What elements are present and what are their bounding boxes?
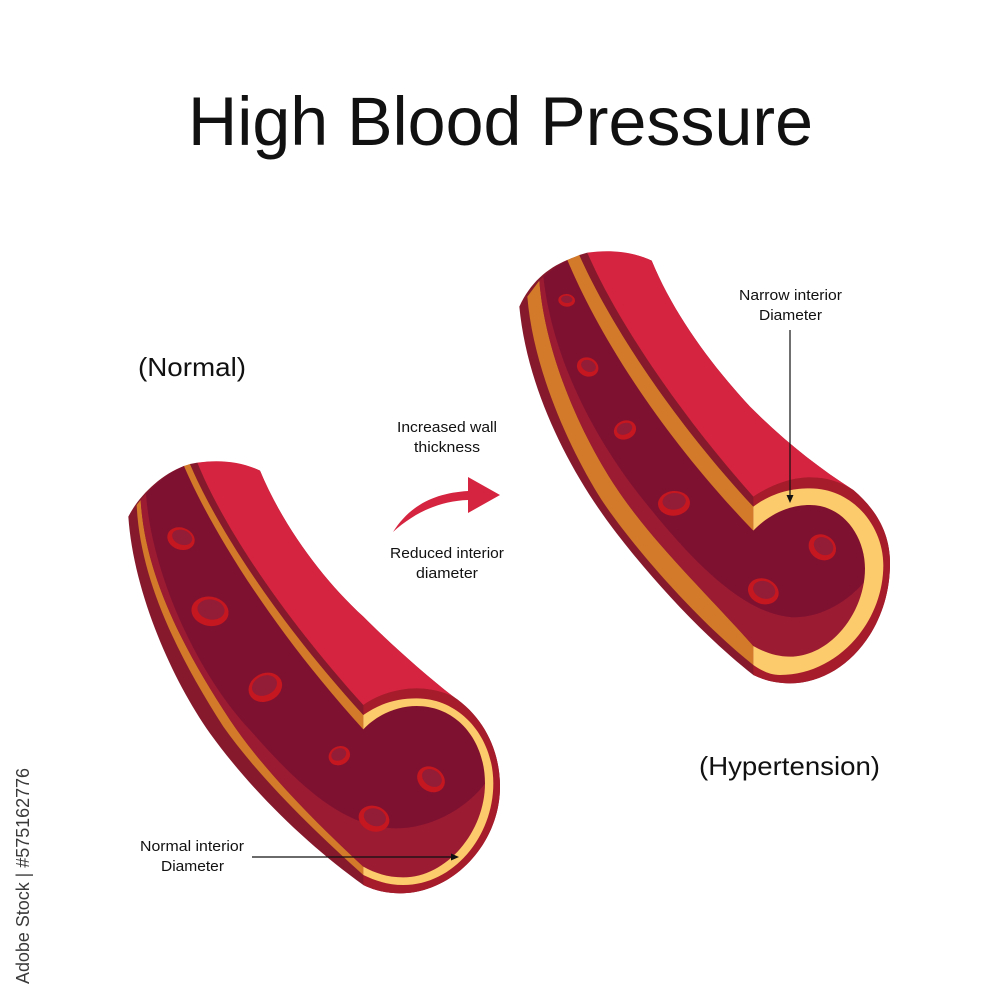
red blood cell 1: [164, 524, 198, 554]
hypertensive blood vessel: [519, 251, 890, 683]
outer wall silhouette: [128, 461, 500, 893]
red blood cell 2: [189, 594, 231, 629]
label: reduced interior diameter: [390, 546, 504, 582]
outer top surface: [587, 251, 853, 497]
red blood cell 4: [657, 490, 691, 517]
upper dark wall stripe: [190, 463, 363, 715]
label: normal interior diameter: Diameter: [161, 859, 224, 875]
end face outer ring: [363, 688, 500, 893]
red blood cell 5: [412, 761, 450, 798]
label: narrow interior diameter: Diameter: [759, 308, 822, 324]
label: increased wall thickness: Increased wall: [397, 420, 497, 436]
label: narrow interior diameter: [739, 288, 842, 324]
label: normal interior diameter: Normal interior: [140, 839, 244, 855]
upper orange wall stripe: [184, 464, 363, 729]
icon: red curved arrow: [393, 477, 500, 532]
label: normal interior diameter: [140, 839, 244, 875]
lower inner wall: [141, 466, 485, 877]
upper dark wall stripe: [579, 253, 753, 507]
label: narrow interior diameter: Narrow interior: [739, 288, 842, 304]
outer top surface: [197, 461, 453, 705]
end face yellow ring: [363, 698, 493, 885]
red blood cell 4: [325, 743, 353, 769]
lumen: [543, 260, 867, 617]
lower orange wall stripe: [137, 500, 363, 875]
end face outer ring: [753, 477, 890, 683]
end face yellow ring: [753, 488, 883, 675]
red blood cell 2: [574, 354, 602, 380]
label: increased wall thickness: thickness: [414, 440, 480, 456]
red blood cell 5: [744, 574, 782, 609]
stock id text: Adobe Stock | #575162776: [13, 768, 33, 984]
label: normal state: (Normal): [138, 352, 246, 382]
normal blood vessel: [128, 461, 500, 893]
lumen: [146, 466, 485, 828]
label: reduced interior diameter: diameter: [416, 566, 478, 582]
label: increased wall thickness: [397, 420, 497, 456]
red blood cell 3: [244, 667, 287, 707]
outer wall silhouette: [519, 252, 890, 683]
arrow: normal diameter pointer: [252, 854, 459, 860]
red blood cell 3: [611, 417, 639, 443]
red blood cell 6: [355, 801, 393, 836]
label: reduced interior diameter: Reduced interior: [390, 546, 504, 562]
label: hypertension state: (Hypertension): [699, 751, 880, 781]
lower inner wall: [539, 260, 865, 657]
arrow: narrow diameter pointer: [786, 330, 794, 503]
red blood cell 1: [558, 293, 576, 307]
red blood cell 6: [804, 529, 841, 566]
title: High Blood Pressure: [188, 83, 813, 160]
lower orange wall stripe: [527, 281, 753, 665]
upper orange wall stripe: [567, 255, 753, 531]
